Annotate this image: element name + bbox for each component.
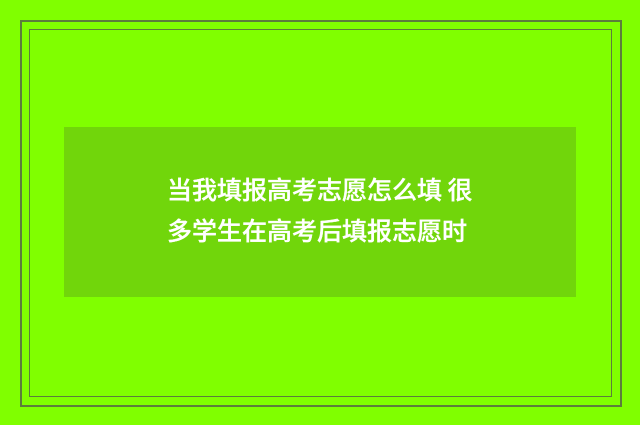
title line 2: 多学生在高考后填报志愿时	[167, 218, 467, 246]
title line 1: 当我填报高考志愿怎么填 很	[167, 177, 472, 205]
panel: title background	[64, 127, 576, 297]
inner frame border	[29, 29, 612, 397]
title text block	[167, 177, 472, 246]
